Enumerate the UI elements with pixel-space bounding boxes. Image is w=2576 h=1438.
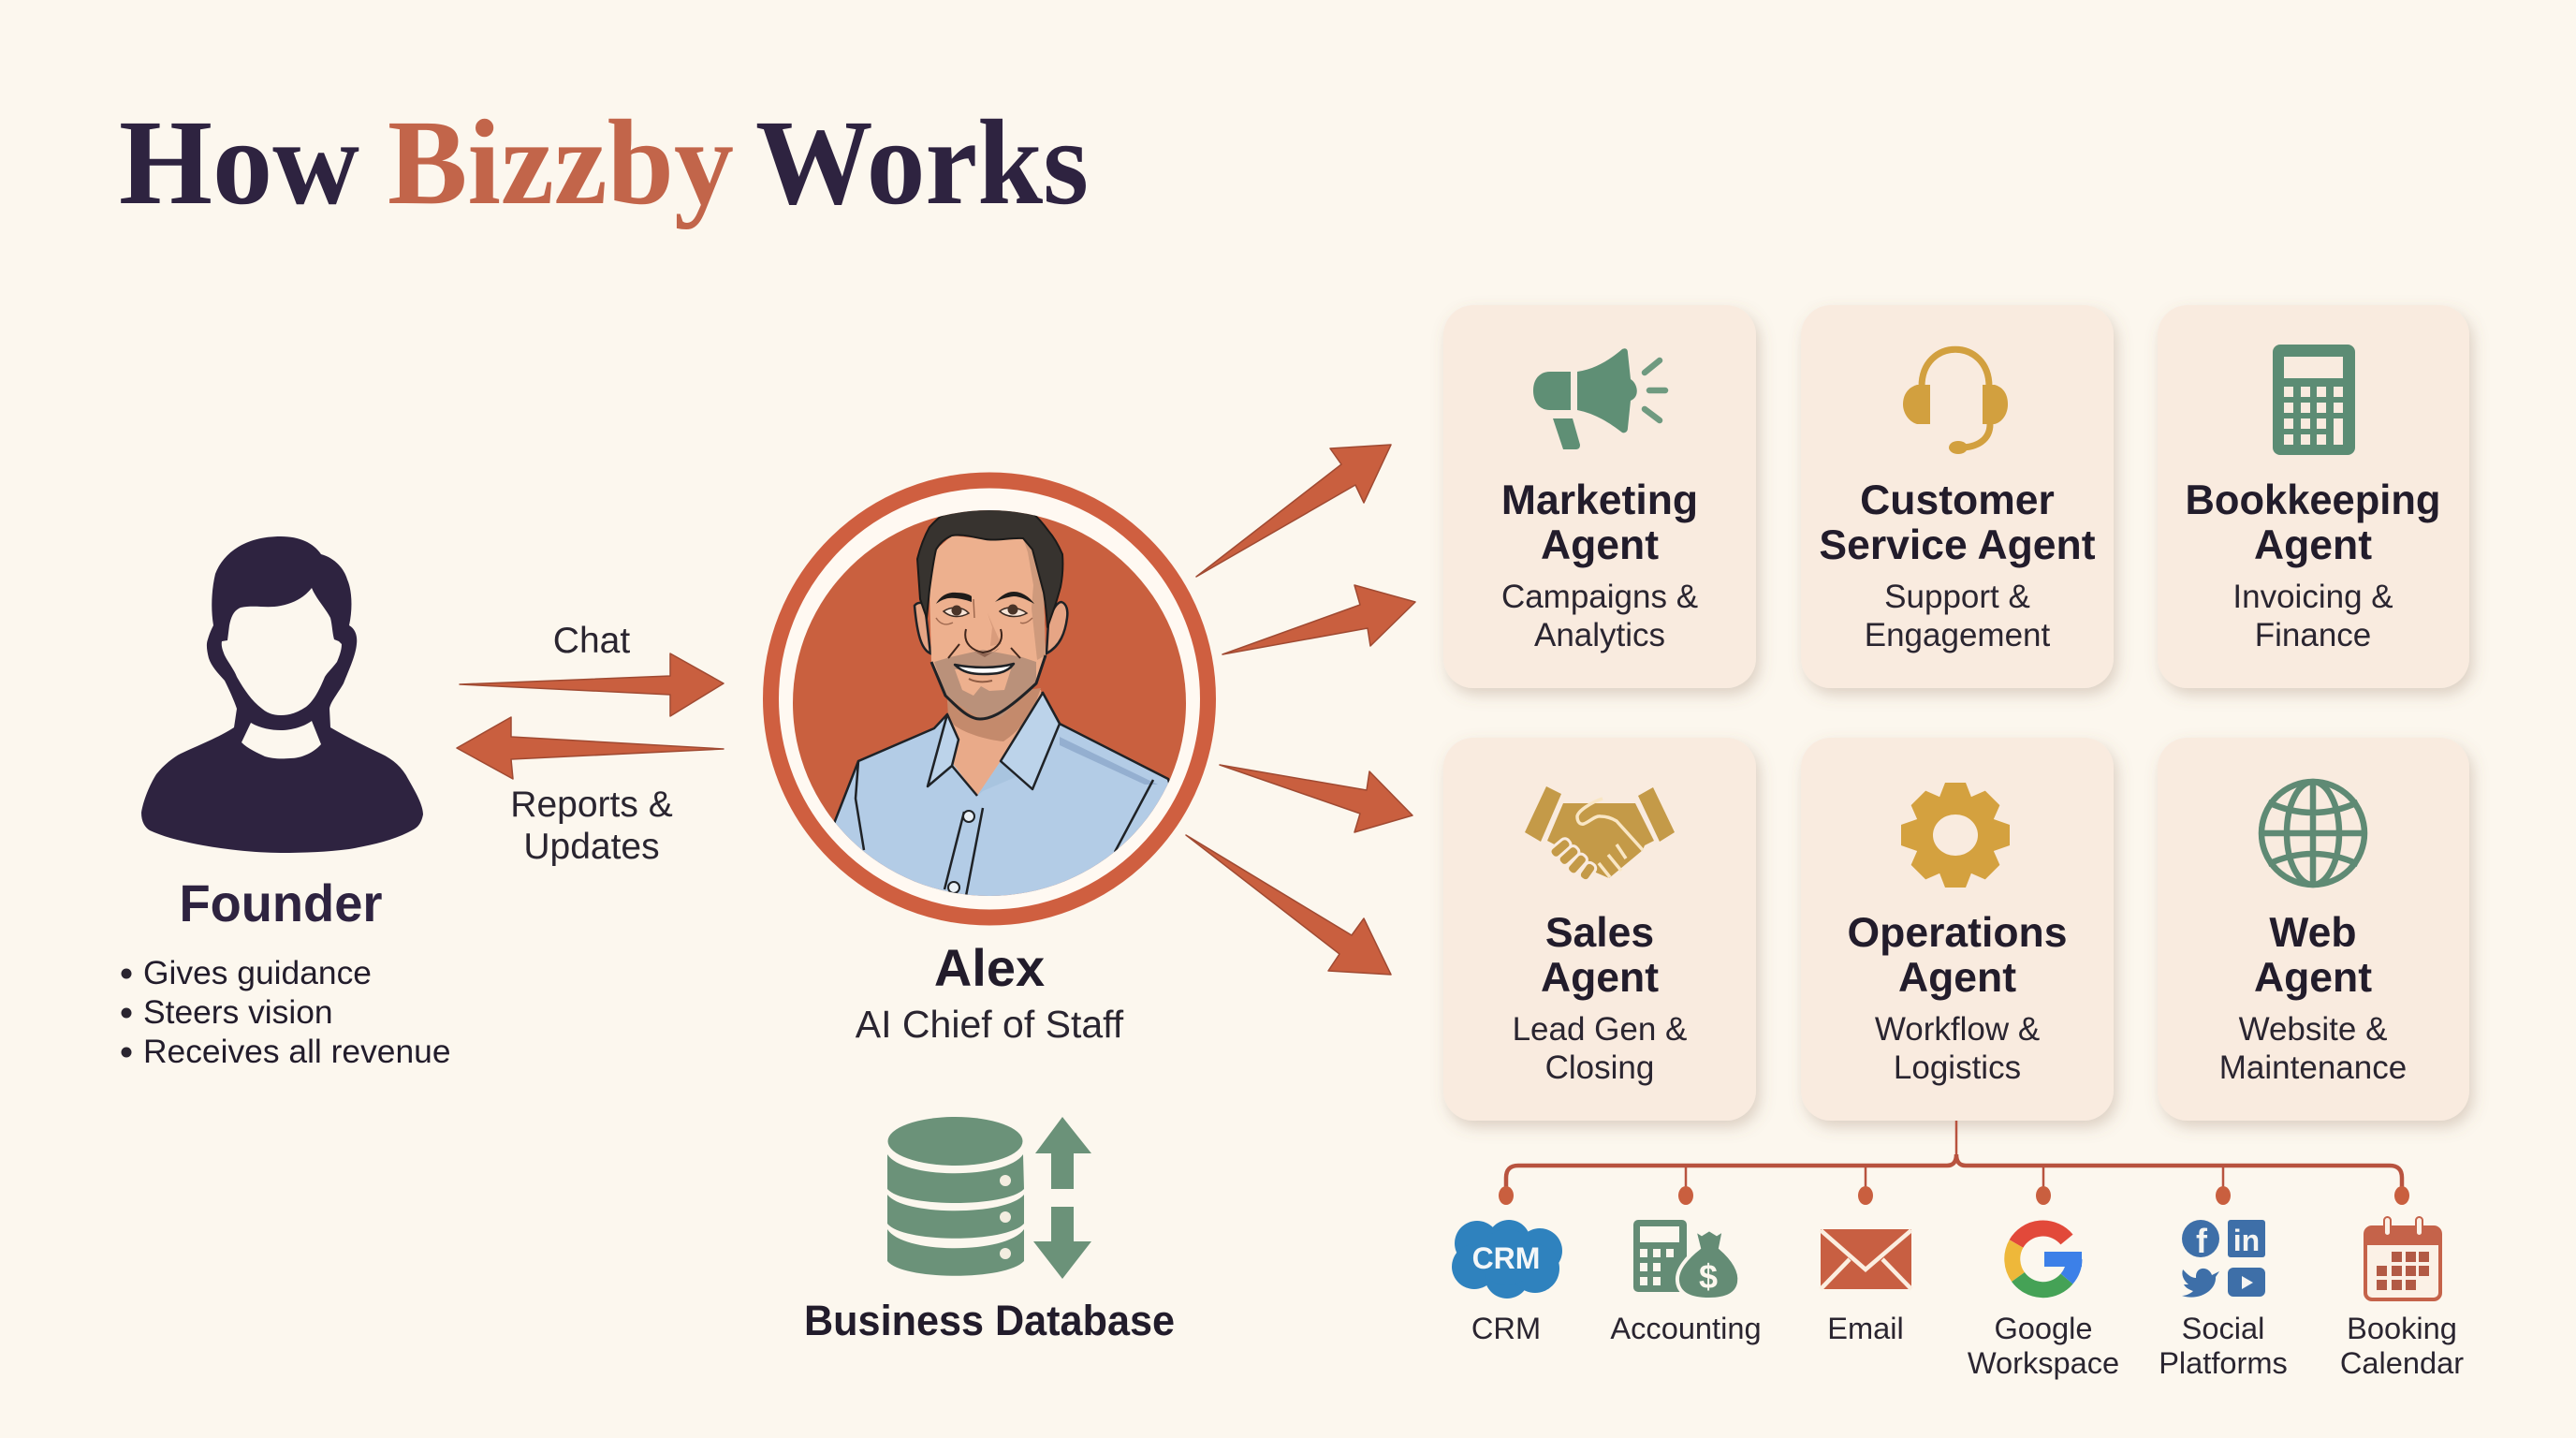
- label: Accounting: [1610, 1311, 1762, 1345]
- description: Lead Gen &: [1513, 1011, 1687, 1048]
- heading: Agent: [1541, 955, 1659, 1001]
- icon: handshake: [1525, 786, 1675, 883]
- arrow: chat to Alex: [460, 653, 724, 716]
- description: [1865, 579, 2051, 653]
- tool: accounting: [1610, 1220, 1762, 1345]
- label: Calendar: [2340, 1345, 2464, 1380]
- heading: Bookkeeping: [2185, 477, 2441, 523]
- description: [2219, 1011, 2407, 1086]
- arrow: reports to founder: [457, 717, 724, 779]
- heading: Web: [2269, 910, 2357, 956]
- description: [2232, 579, 2393, 653]
- icon: megaphone: [1533, 348, 1665, 449]
- heading: Customer: [1860, 477, 2055, 523]
- label: Google: [1994, 1311, 2093, 1345]
- title: [119, 95, 1089, 230]
- label: CRM: [1471, 1311, 1541, 1345]
- heading: Agent: [1541, 522, 1659, 568]
- heading: Business Database: Business Database: [804, 1297, 1175, 1344]
- description: Maintenance: [2219, 1049, 2407, 1086]
- label: Platforms: [2159, 1345, 2288, 1380]
- heading: [2254, 910, 2372, 1001]
- title: Bizzby: [388, 95, 734, 230]
- arrow: to operations: [1186, 835, 1391, 975]
- icon: headset: [1903, 349, 2008, 454]
- icon: envelope: [1821, 1229, 1911, 1289]
- label: [2159, 1311, 2288, 1380]
- heading: [2185, 477, 2441, 568]
- heading: [1501, 477, 1698, 568]
- description: Closing: [1545, 1049, 1654, 1086]
- heading: Founder: Founder: [180, 873, 382, 932]
- description: Campaigns &: [1501, 579, 1698, 615]
- icon: social logos: [2182, 1220, 2265, 1298]
- label: reports and updates: [510, 785, 673, 867]
- list: founder bullets: Steers vision: [143, 993, 333, 1031]
- icon: CRM cloud: CRM: [1472, 1241, 1540, 1275]
- heading: Marketing: [1501, 477, 1698, 523]
- icon: Alex avatar: [771, 480, 1208, 917]
- list: founder bullets: Gives guidance: [143, 954, 372, 991]
- icon: gear: [1901, 783, 2010, 888]
- heading: [1848, 910, 2067, 1001]
- description: Workflow &: [1875, 1011, 2040, 1048]
- heading: Service Agent: [1819, 522, 2096, 568]
- label: reports and updates: Updates: [523, 827, 660, 867]
- heading: Agent: [2254, 955, 2372, 1001]
- heading: [1819, 477, 2096, 568]
- label: Social: [2182, 1311, 2264, 1345]
- label: Workspace: [1968, 1345, 2119, 1380]
- label: Email: [1827, 1311, 1904, 1345]
- description: Finance: [2255, 617, 2371, 653]
- tool: social platforms: [2159, 1220, 2288, 1380]
- icon: globe: [2261, 782, 2364, 885]
- tool: CRM: [1452, 1220, 1562, 1345]
- heading: Operations: [1848, 910, 2067, 956]
- arrow: to customer service: [1222, 585, 1415, 654]
- icon: calculator and money bag: [1633, 1220, 1739, 1299]
- subtitle: role: AI Chief of Staff: [856, 1003, 1124, 1046]
- panel: founder: [122, 536, 451, 1070]
- icon: social logos: f: [2196, 1222, 2208, 1260]
- description: Invoicing &: [2232, 579, 2393, 615]
- label: chat: Chat: [553, 621, 630, 661]
- arrow: to marketing: [1196, 445, 1391, 577]
- icon: database: [887, 1117, 1091, 1279]
- tool: google workspace: [1968, 1228, 2119, 1380]
- description: [1513, 1011, 1687, 1086]
- connector: tool tree: [1499, 1121, 2409, 1205]
- label: Booking: [2347, 1311, 2457, 1345]
- panel: customer service agent: [1801, 305, 2114, 688]
- heading: Agent: [2254, 522, 2372, 568]
- title: Works: [755, 95, 1089, 230]
- list: founder bullets: Receives all revenue: [143, 1033, 451, 1070]
- label: reports and updates: Reports &: [510, 785, 673, 825]
- panel: Alex: [771, 480, 1208, 1046]
- icon: founder silhouette: [141, 536, 423, 853]
- icon: calculator: [2273, 345, 2355, 455]
- panel: business database: [804, 1117, 1175, 1344]
- panel: marketing agent: [1443, 305, 1756, 688]
- description: Logistics: [1894, 1049, 2021, 1086]
- panel: sales agent: [1443, 738, 1756, 1121]
- description: Support &: [1884, 579, 2030, 615]
- panel: operations agent: [1801, 738, 2114, 1121]
- icon: calculator and money bag: $: [1699, 1257, 1718, 1296]
- heading: Agent: [1898, 955, 2016, 1001]
- description: [1501, 579, 1698, 653]
- icon: calendar: [2365, 1217, 2440, 1299]
- label: [2340, 1311, 2464, 1380]
- tool: booking calendar: [2340, 1217, 2464, 1380]
- icon: social logos: in: [2233, 1224, 2260, 1257]
- heading: [1541, 910, 1659, 1001]
- description: Engagement: [1865, 617, 2051, 653]
- icon: Google G: [2012, 1228, 2082, 1290]
- panel: web agent: [2158, 738, 2469, 1121]
- description: Website &: [2239, 1011, 2387, 1048]
- title: How: [119, 95, 359, 230]
- description: Analytics: [1534, 617, 1665, 653]
- tool: email: [1821, 1229, 1911, 1345]
- arrow: to sales: [1220, 765, 1412, 832]
- heading: Alex: Alex: [934, 938, 1045, 997]
- list: founder bullets: [122, 954, 451, 1070]
- panel: bookkeeping agent: [2158, 305, 2469, 688]
- label: [1968, 1311, 2119, 1380]
- heading: Sales: [1545, 910, 1654, 956]
- description: [1875, 1011, 2040, 1086]
